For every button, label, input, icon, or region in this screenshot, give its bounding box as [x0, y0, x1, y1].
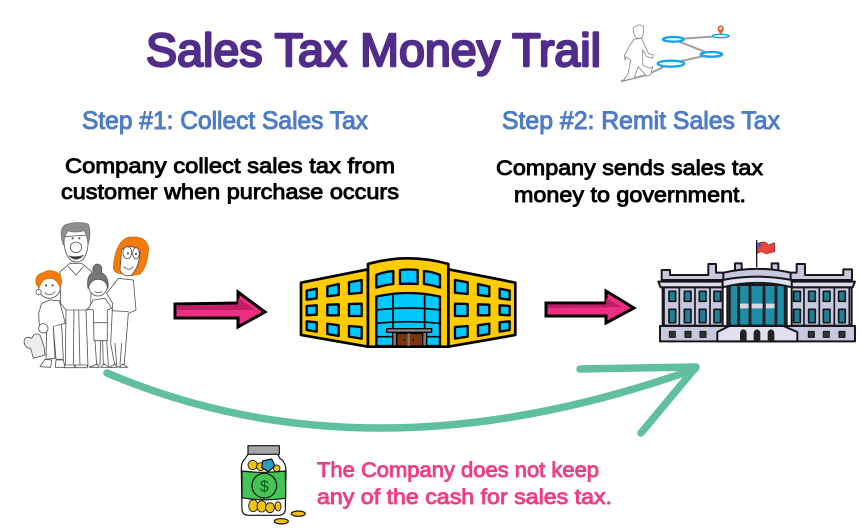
- text: step 1 description: Company collect sales tax from: [65, 154, 395, 178]
- title: Sales Tax Money Trail: [146, 24, 601, 76]
- icon: family: [24, 223, 149, 368]
- toy: [24, 334, 45, 358]
- curved green arrow: money flow to government: [107, 367, 696, 433]
- text: step 1 description: [61, 154, 399, 204]
- man: [60, 223, 92, 368]
- icon: company building: [301, 258, 515, 347]
- girl: [87, 264, 112, 367]
- text: step 2 description: money to government.: [514, 183, 746, 207]
- arrow: customer to company: [175, 292, 265, 327]
- icon: jar of money: [241, 446, 305, 524]
- callout text: [317, 458, 612, 509]
- heading: step 2: Step #2: Remit Sales Tax: [502, 107, 780, 135]
- callout text: The Company does not keep: [317, 458, 599, 482]
- woman: [107, 237, 149, 367]
- icon: jar of money: $: [260, 479, 269, 496]
- text: step 1 description: customer when purchase occurs: [61, 180, 399, 204]
- icon: government building: [658, 240, 855, 341]
- text: step 2 description: Company sends sales tax: [496, 156, 763, 180]
- boy: [36, 271, 65, 367]
- icon: person walking a path to a location pin: [622, 25, 729, 81]
- arrow: company to government: [546, 291, 634, 323]
- text: step 2 description: [496, 156, 763, 207]
- callout text: any of the cash for sales tax.: [317, 485, 612, 509]
- heading: step 1: Step #1: Collect Sales Tax: [82, 107, 368, 135]
